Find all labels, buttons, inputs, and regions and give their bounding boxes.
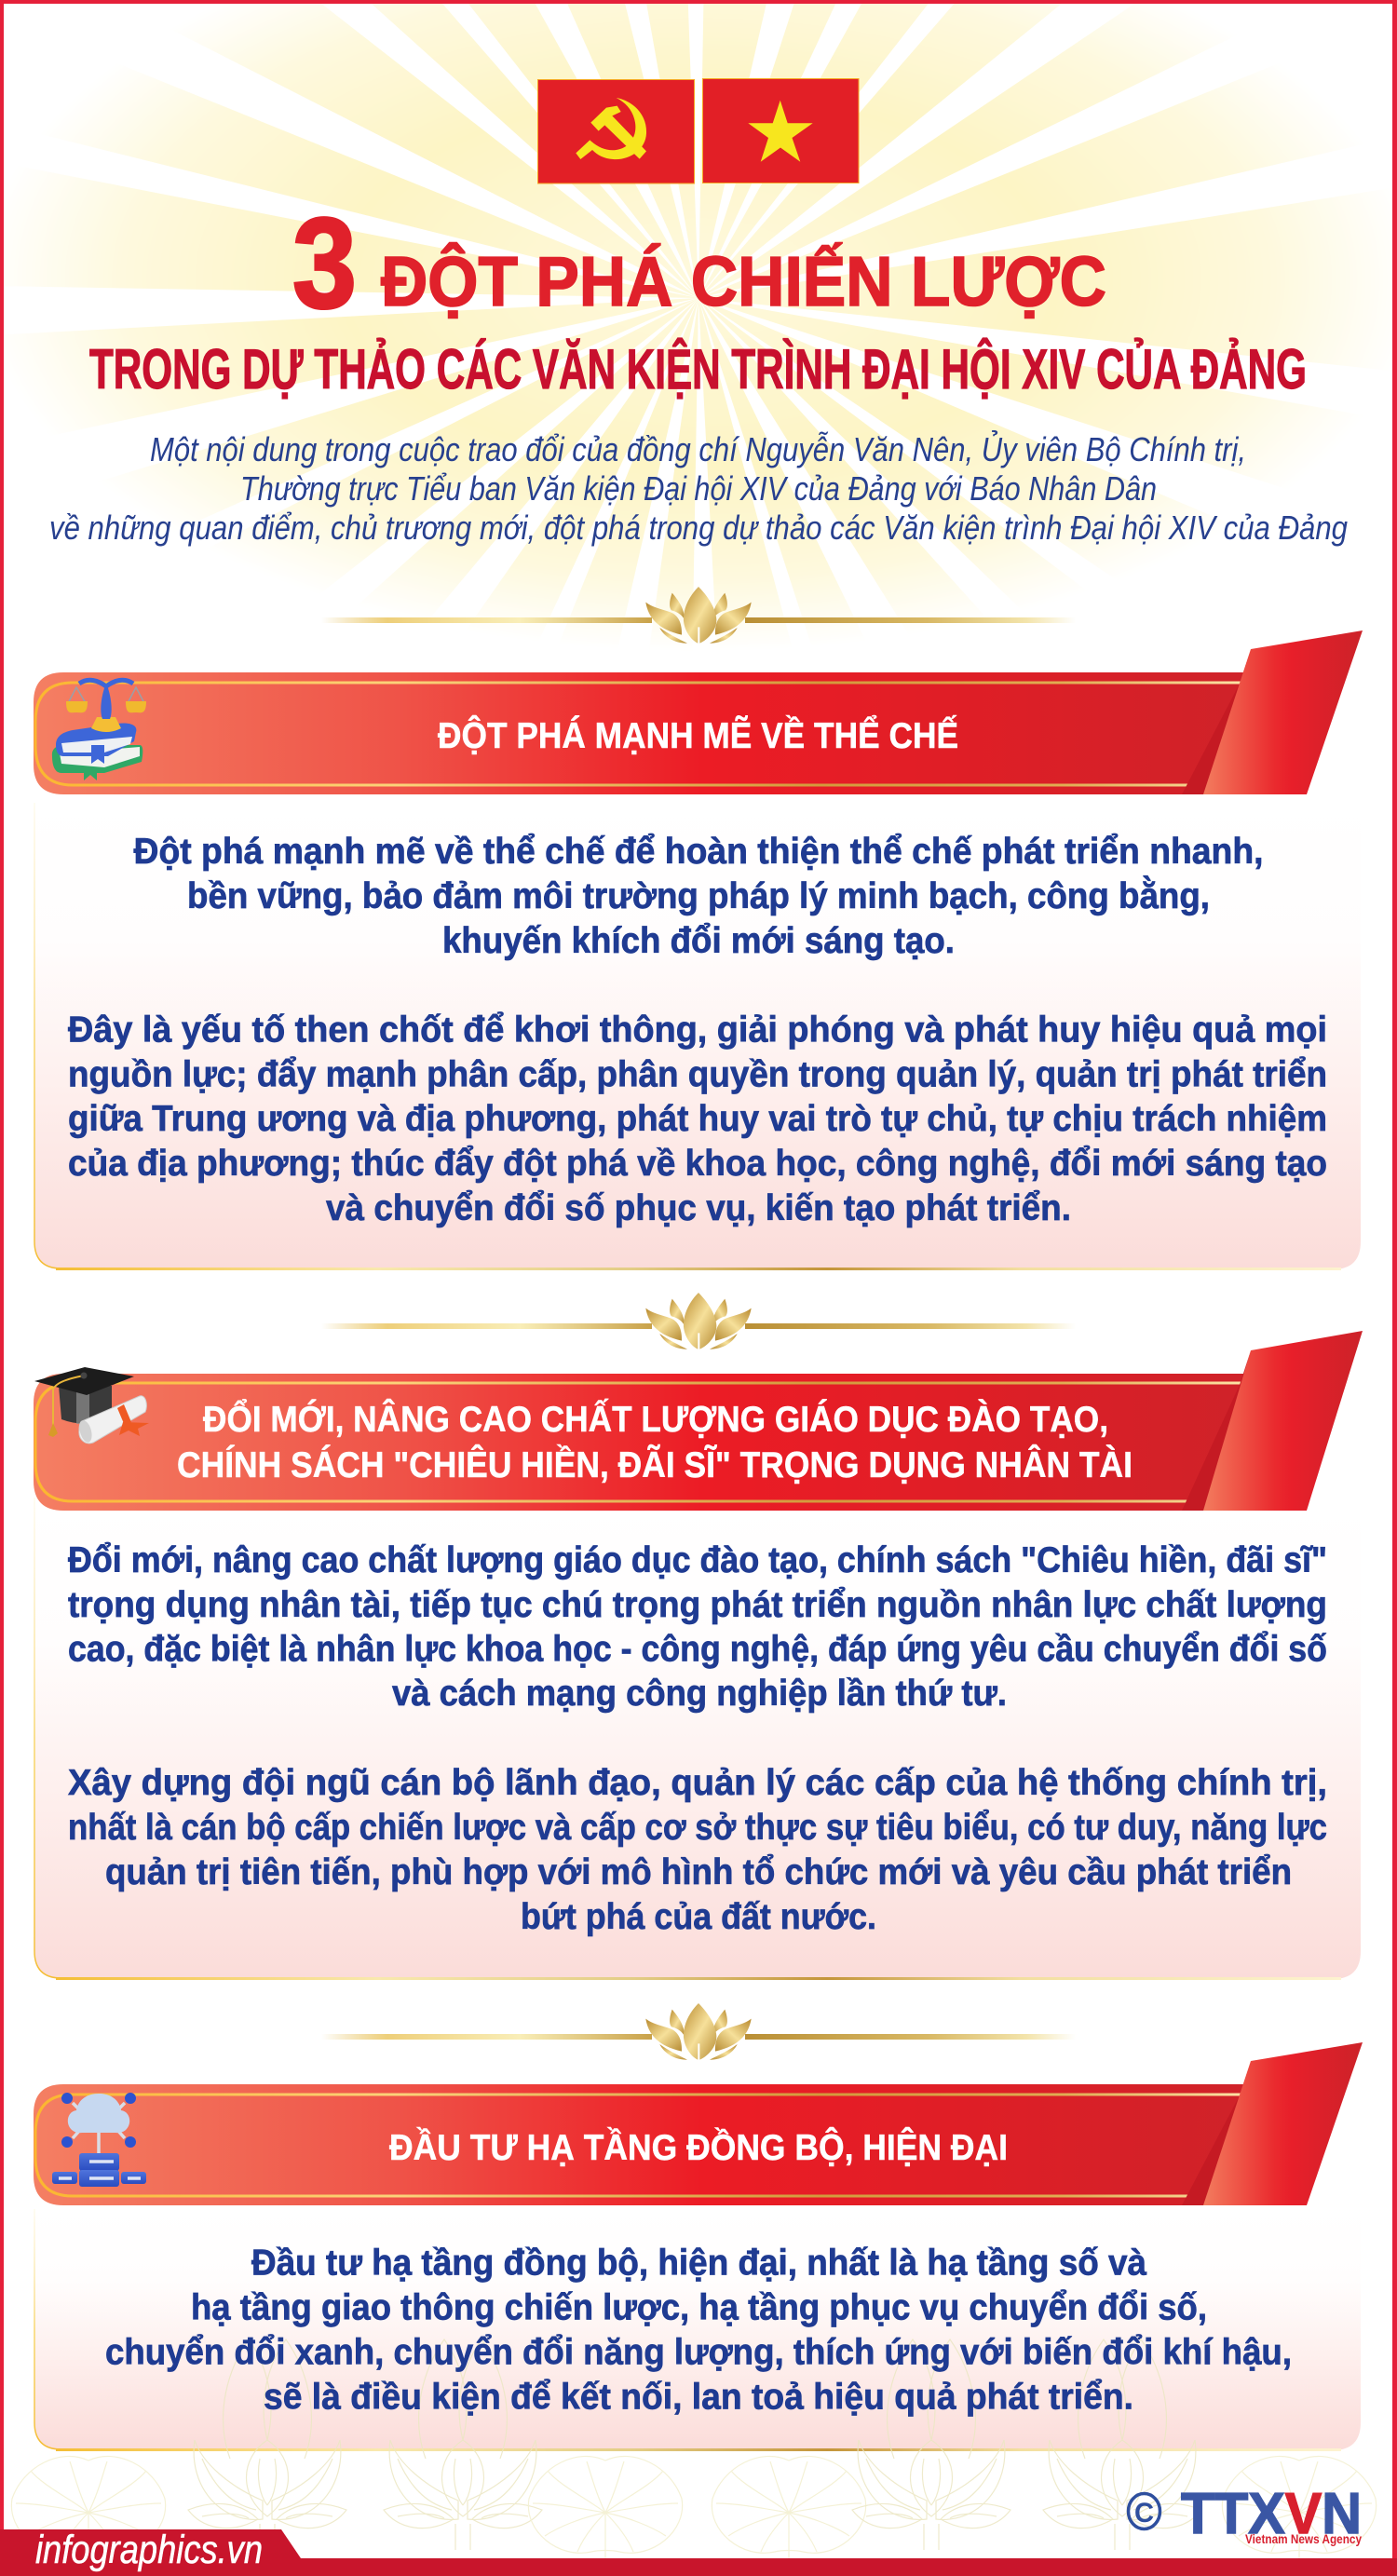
body text 1 xyxy=(68,832,1327,1228)
body text 1: giữa Trung ương và địa phương, phát huy vai trò tự chủ, tự chịu trách nhiệm xyxy=(68,1099,1327,1139)
lotus divider 1 xyxy=(321,587,1076,644)
body text 2: quản trị tiên tiến, phù hợp với mô hình tổ chức mới và yêu cầu phát triển xyxy=(105,1852,1292,1892)
icon: graduation cap and diploma xyxy=(34,1367,149,1444)
panel: institutions xyxy=(34,630,1363,1270)
intro text: Thường trực Tiểu ban Văn kiện Đại hội XIV của Đảng với Báo Nhân Dân xyxy=(240,469,1157,508)
icon: cloud and servers xyxy=(52,2093,146,2187)
body text 1: Đột phá mạnh mẽ về thể chế để hoàn thiện thể chế phát triển nhanh, xyxy=(134,832,1263,872)
body text 1: của địa phương; thúc đẩy đột phá về khoa học, công nghệ, đổi mới sáng tạo xyxy=(68,1144,1327,1184)
sunburst background xyxy=(258,0,1139,739)
lotus line pattern at the bottom xyxy=(11,2339,1377,2561)
agency wordmark: TTXVN xyxy=(1181,2482,1362,2546)
body text 3: chuyển đổi xanh, chuyển đổi năng lượng, thích ứng với biến đổi khí hậu, xyxy=(105,2332,1292,2373)
body text 3: sẽ là điều kiện để kết nối, lan toả hiệu quả phát triển. xyxy=(264,2377,1133,2418)
banner 2 xyxy=(34,1331,1363,1511)
body text 1: Đây là yếu tố then chốt để khơi thông, giải phóng và phát huy hiệu quả mọi xyxy=(68,1010,1327,1051)
footer bar xyxy=(0,2528,1397,2576)
title xyxy=(89,192,1307,400)
banner 1 xyxy=(34,630,1363,794)
body text 3: Đầu tư hạ tầng đồng bộ, hiện đại, nhất là hạ tầng số và xyxy=(251,2243,1146,2284)
Vietnam flag xyxy=(702,78,859,183)
body text 3: hạ tầng giao thông chiến lược, hạ tầng phục vụ chuyển đổi số, xyxy=(191,2287,1207,2328)
TTXVN logo xyxy=(1129,2482,1362,2546)
title line 1: ĐỘT PHÁ CHIẾN LƯỢC xyxy=(381,242,1106,320)
party flag xyxy=(538,80,695,183)
title numeral: 3 xyxy=(292,192,357,335)
body text 2: trọng dụng nhân tài, tiếp tục chú trọng phát triển nguồn nhân lực chất lượng xyxy=(68,1585,1327,1625)
banner 3 xyxy=(34,2042,1363,2205)
intro text: Một nội dung trong cuộc trao đổi của đồng chí Nguyễn Văn Nên, Ủy viên Bộ Chính trị, xyxy=(150,429,1246,468)
panel: education xyxy=(34,1331,1363,1980)
body text 3 xyxy=(105,2243,1292,2418)
panel: infrastructure xyxy=(34,2042,1363,2451)
body text 2: Xây dựng đội ngũ cán bộ lãnh đạo, quản lý các cấp của hệ thống chính trị, xyxy=(68,1763,1327,1803)
lotus divider 3 xyxy=(321,2003,1076,2060)
website label: infographics.vn xyxy=(35,2528,263,2572)
body text 1: và chuyển đổi số phục vụ, kiến tạo phát triển. xyxy=(326,1188,1071,1228)
body text 2 xyxy=(68,1540,1327,1937)
banner 3: ĐẦU TƯ HẠ TẦNG ĐỒNG BỘ, HIỆN ĐẠI xyxy=(389,2126,1008,2168)
body text 2: và cách mạng công nghiệp lần thứ tư. xyxy=(392,1674,1007,1714)
national and party flags xyxy=(538,78,859,183)
body text 2: bứt phá của đất nước. xyxy=(521,1897,876,1937)
body box 2 xyxy=(34,1498,1361,1980)
intro text xyxy=(49,429,1348,547)
copyright mark: C xyxy=(1134,2498,1154,2529)
copyright mark xyxy=(1129,2494,1160,2529)
body text 2: Đổi mới, nâng cao chất lượng giáo dục đào tạo, chính sách "Chiêu hiền, đãi sĩ" xyxy=(68,1540,1327,1580)
lotus divider 2 xyxy=(321,1293,1076,1349)
banner 2: ĐỔI MỚI, NÂNG CAO CHẤT LƯỢNG GIÁO DỤC ĐÀO TẠO, xyxy=(203,1398,1108,1440)
body box 1 xyxy=(34,799,1361,1270)
body box 3 xyxy=(34,2209,1361,2451)
banner 1: ĐỘT PHÁ MẠNH MẼ VỀ THỂ CHẾ xyxy=(438,714,958,756)
body text 1: bền vững, bảo đảm môi trường pháp lý minh bạch, công bằng, xyxy=(187,875,1210,916)
body text 1: khuyến khích đổi mới sáng tạo. xyxy=(442,921,955,961)
banner 2: CHÍNH SÁCH "CHIÊU HIỀN, ĐÃI SĨ" TRỌNG DỤNG NHÂN TÀI xyxy=(177,1444,1133,1485)
agency caption: Vietnam News Agency xyxy=(1245,2531,1362,2546)
body text 1: nguồn lực; đẩy mạnh phân cấp, phân quyền trong quản lý, quản trị phát triển xyxy=(68,1054,1327,1095)
icon: scales on books xyxy=(52,680,146,780)
